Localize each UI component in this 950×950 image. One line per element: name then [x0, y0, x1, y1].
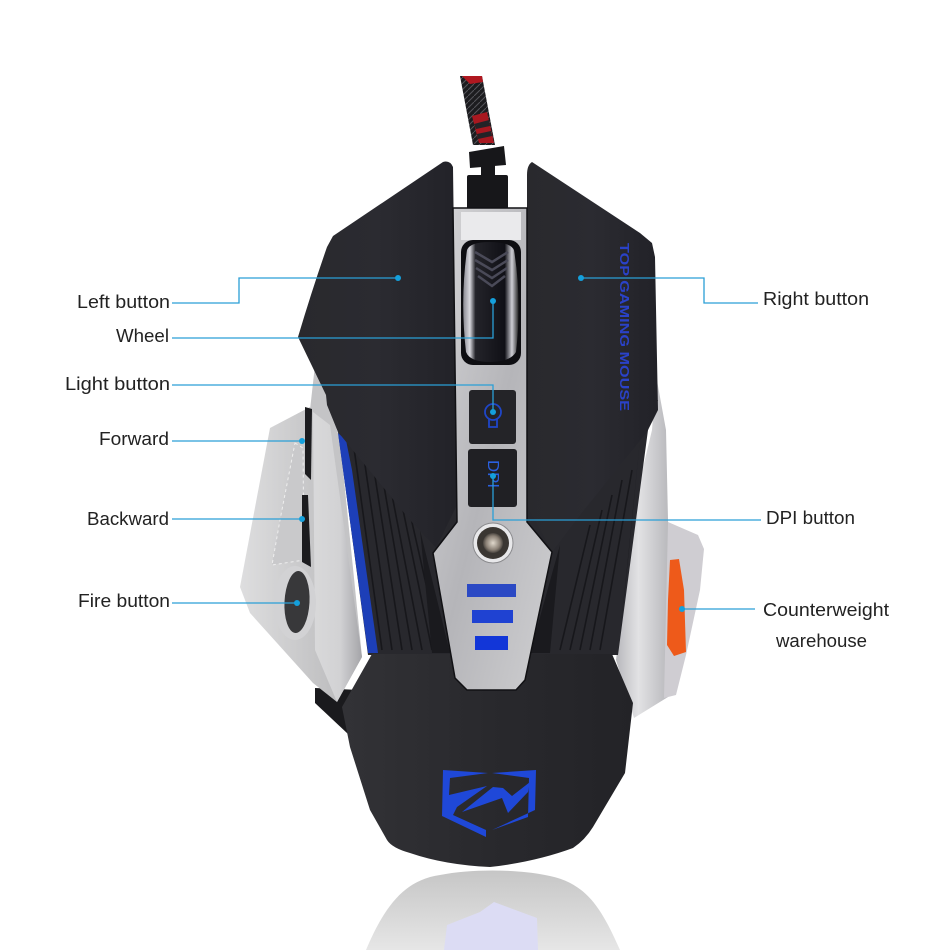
- leader: left button: [172, 275, 401, 303]
- blue indicator lights: [467, 584, 516, 650]
- textured grip pattern: [272, 443, 304, 565]
- label: DPI button: DPI button: [766, 507, 855, 528]
- label: Forward: Forward: [99, 428, 169, 449]
- cable strain relief: [467, 146, 508, 211]
- logo shield: [442, 770, 536, 837]
- backward button: [302, 495, 311, 567]
- blue side light strip: [338, 433, 378, 653]
- light button: [469, 390, 516, 444]
- label: Left button: Left button: [77, 291, 170, 312]
- leader: fire button: [172, 600, 300, 606]
- leader: counterweight: [679, 606, 755, 612]
- main dark body with ribs: [328, 400, 658, 655]
- label: Backward: Backward: [87, 508, 169, 529]
- leader: wheel: [172, 298, 496, 338]
- leader: light button: [172, 385, 496, 415]
- label: warehouse: warehouse: [775, 630, 867, 651]
- label: Fire button: Fire button: [78, 590, 170, 611]
- DPI button: [468, 449, 517, 507]
- palm rest: [342, 654, 633, 867]
- side print: TOP GAMING MOUSE: TOP GAMING MOUSE: [617, 243, 632, 411]
- counterweight warehouse block: [664, 522, 704, 698]
- left button shell: [298, 162, 457, 548]
- leader: forward: [172, 438, 305, 444]
- scroll wheel: [461, 240, 521, 365]
- forward button: [305, 407, 312, 480]
- right button shell: [527, 162, 658, 552]
- center silver plate: [433, 208, 552, 690]
- leader: right button: [578, 275, 758, 303]
- fire button: [274, 566, 316, 640]
- leader: DPI button: [490, 473, 761, 520]
- reflection under mouse: [366, 870, 620, 950]
- label: Counterweight: Counterweight: [763, 599, 889, 620]
- label: Light button: Light button: [65, 373, 170, 394]
- right side silver panel: [616, 375, 672, 718]
- screw: [473, 523, 513, 563]
- left side wing silver: [240, 365, 362, 702]
- leader: backward: [172, 516, 305, 522]
- label: Right button: Right button: [763, 288, 869, 309]
- orange counterweight cover: [667, 559, 686, 656]
- label: Wheel: Wheel: [116, 325, 169, 346]
- DPI button: DPI: [484, 460, 501, 488]
- icon: light bulb: [485, 404, 501, 427]
- rear left black base: [315, 688, 360, 734]
- cable: [460, 76, 508, 211]
